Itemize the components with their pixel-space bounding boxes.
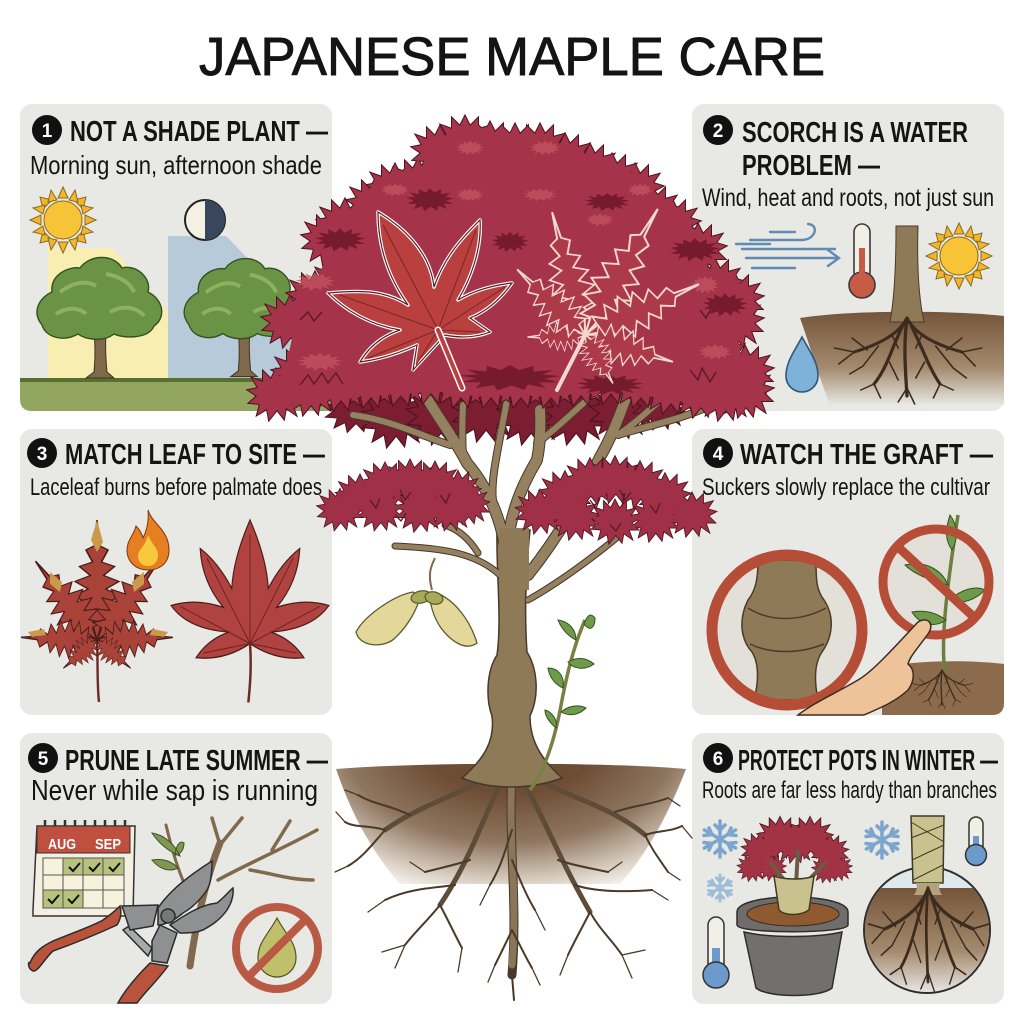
roots	[335, 775, 692, 1000]
heading 2: PROBLEM —	[742, 150, 880, 182]
soil	[800, 312, 1004, 405]
tree in afternoon shade	[184, 259, 303, 377]
icon: snowflake	[704, 821, 736, 857]
icon: thermometer	[703, 917, 729, 988]
palmate leaf highlight	[328, 212, 512, 388]
icon: pointing hand	[798, 620, 931, 715]
icon: calendar	[33, 820, 135, 916]
heading 5: PRUNE LATE SUMMER —	[65, 745, 328, 777]
sucker in prohibition ring	[883, 515, 989, 672]
icon: snowflake	[866, 822, 898, 858]
icon: flame	[127, 510, 169, 570]
heading 2	[703, 115, 968, 182]
title: JAPANESE MAPLE CARE	[199, 27, 825, 87]
icon: branches	[152, 818, 317, 966]
icon: sun	[926, 223, 992, 289]
subheading 3: Laceleaf burns before palmate does	[30, 474, 322, 501]
light foliage flecks	[295, 141, 732, 371]
panel 1: not a shade plant	[20, 104, 332, 411]
heading 1: NOT A SHADE PLANT —	[70, 116, 328, 148]
heading 3	[27, 438, 325, 471]
palmate leaf	[171, 520, 329, 702]
dark underside of canopy	[324, 379, 688, 448]
icon: water drop	[786, 337, 818, 392]
heading 5: 5	[38, 749, 49, 770]
laceleaf	[18, 520, 176, 702]
icon: sun	[30, 187, 96, 253]
trunk	[462, 530, 562, 787]
panel 2: scorch	[692, 104, 1004, 411]
panel 3: match leaf	[18, 429, 332, 715]
small right canopy	[516, 457, 716, 543]
heading 5	[28, 743, 328, 777]
sucker shoot	[530, 615, 595, 790]
small roots	[912, 670, 973, 709]
seed samara	[356, 558, 477, 646]
icon: calendar: SEP	[95, 836, 121, 853]
root ball with wrapped trunk	[860, 816, 995, 993]
dark foliage gaps	[315, 188, 747, 395]
panel 6: protect pots	[692, 733, 1004, 1004]
icon: calendar: AUG	[48, 836, 76, 853]
main canopy	[248, 116, 773, 420]
small left canopy	[318, 460, 489, 531]
tree in morning sun	[37, 258, 162, 378]
icon: half moon	[185, 200, 225, 240]
potted maple	[737, 817, 852, 996]
no sap icon	[236, 907, 318, 989]
icon: thermometer	[849, 224, 875, 298]
laceleaf highlight	[503, 197, 708, 391]
panel 5: prune	[20, 733, 332, 1004]
panel 4: graft	[692, 429, 1004, 715]
ground and soil under tree	[336, 764, 686, 884]
heading 4: 4	[713, 444, 724, 465]
branches	[353, 385, 712, 600]
heading 6: 6	[713, 749, 723, 770]
icon: pruners	[28, 861, 233, 1003]
graft closeup in prohibition ring	[712, 555, 862, 705]
heading 2: 2	[713, 121, 723, 142]
heading 1: 1	[42, 121, 53, 142]
trunk and roots	[834, 226, 982, 404]
icon: small snowflake	[708, 875, 732, 901]
light and shade background	[20, 236, 332, 411]
subheading 5: Never while sap is running	[31, 775, 318, 807]
heading 3: 3	[37, 444, 47, 465]
icon: wind	[736, 224, 839, 268]
heading 3: MATCH LEAF TO SITE —	[65, 439, 325, 471]
subheading 1: Morning sun, afternoon shade	[30, 150, 322, 180]
soil	[882, 661, 1004, 715]
heading 1	[32, 115, 328, 148]
icon: thermometer	[966, 817, 986, 866]
